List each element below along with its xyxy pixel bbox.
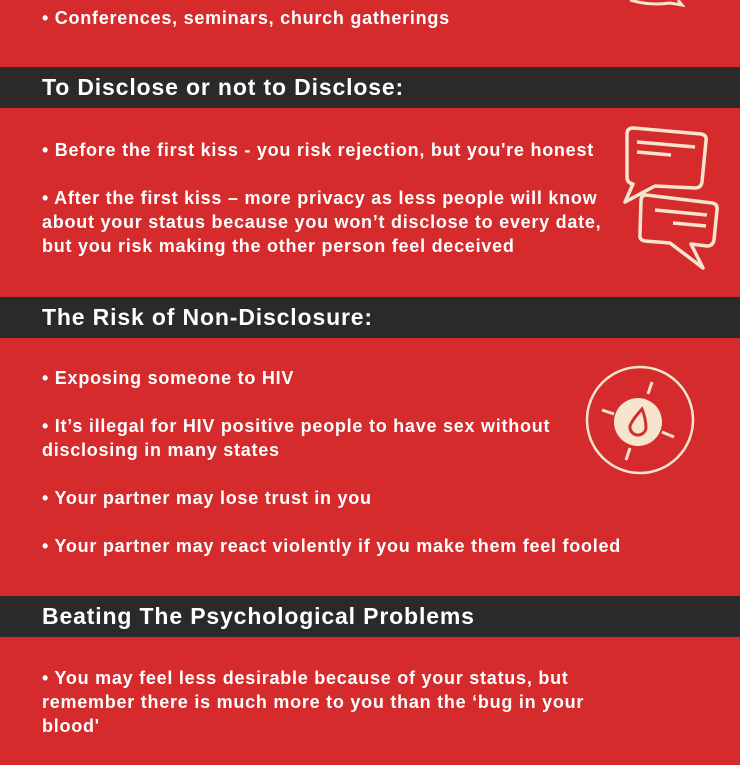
text block: disclose bullets: • Before the first kiss - you risk rejection, but you're honest • After the first kiss – more privacy as less people will know about your status because you won’t disclose to every date, but you risk making the other person feel deceived [42, 140, 601, 256]
text block: risk bullets: disclosing in many states • Your partner may lose trust in you • Your partner may react violently if you make them feel fooled [42, 440, 621, 556]
icon: partial speech bubble top [630, 0, 686, 8]
heading bar: risk [0, 297, 740, 338]
icon: speech bubbles [623, 126, 719, 270]
heading bar: disclose [0, 67, 740, 108]
text: conferences: • Conferences, seminars, church gatherings [42, 8, 450, 28]
icon: blood drop circle [586, 366, 694, 474]
heading bar: disclose: To Disclose or not to Disclose: [42, 74, 404, 100]
text block: risk bullets [42, 368, 621, 556]
heading bar: risk: The Risk of Non-Disclosure: [42, 304, 373, 330]
text block: risk bullets: • Exposing someone to HIV • It’s illegal for HIV positive people to have sex without [42, 368, 550, 436]
heading bar: psychological [0, 596, 740, 637]
heading bar: psychological: Beating The Psychological Problems [42, 603, 475, 629]
text block: psychological bullet: • You may feel less desirable because of your status, but remember there is much more to you than the ‘bug in your blood' [42, 668, 584, 736]
